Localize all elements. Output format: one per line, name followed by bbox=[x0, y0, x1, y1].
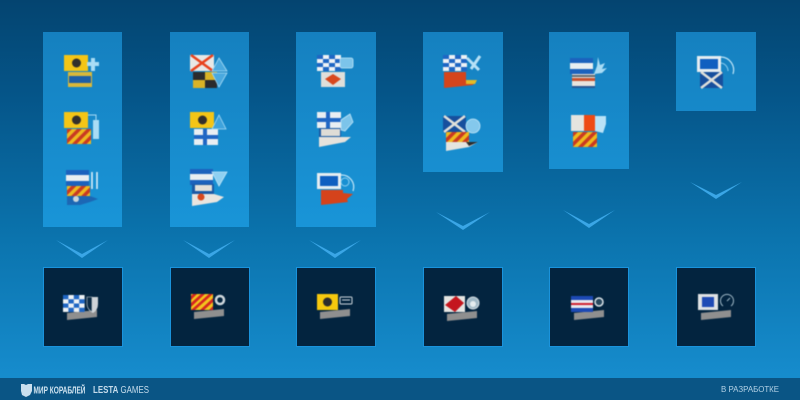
panel: column 3 signals bbox=[296, 32, 376, 227]
panel: result 6 bbox=[676, 268, 756, 346]
arrow: column 4 bbox=[436, 212, 490, 230]
footer bar bbox=[0, 378, 800, 400]
panel: column 2 signals bbox=[170, 32, 249, 227]
panel: column 6 signals bbox=[676, 32, 756, 111]
arrow: column 1 bbox=[56, 240, 108, 258]
logo: lesta games: LESTA GAMES bbox=[93, 385, 149, 396]
arrow: column 2 bbox=[183, 240, 235, 258]
signal: checkered flag with capsule icon bbox=[317, 55, 353, 87]
signal: red cross flag with triangles icon bbox=[190, 55, 227, 88]
logo: game title: МИР КОРАБЛЕЙ bbox=[34, 384, 86, 396]
signal: blue square flag with arc icon bbox=[697, 56, 734, 88]
signal: yellow flag with triangle icon bbox=[190, 112, 226, 145]
panel: result 5 bbox=[550, 268, 628, 346]
flag and lifebuoy icon bbox=[191, 294, 224, 319]
arrow: column 5 bbox=[563, 210, 615, 228]
panel: result 1 bbox=[44, 268, 122, 346]
panel: result 3 bbox=[296, 268, 376, 346]
flag and sphere icon bbox=[444, 296, 479, 321]
arrow: column 6 bbox=[690, 182, 742, 199]
signal: checkered and red pennant with plane icon bbox=[443, 55, 480, 88]
panel: column 1 signals bbox=[43, 32, 122, 227]
logo: shield bbox=[21, 384, 32, 397]
arrow: column 3 bbox=[309, 240, 361, 258]
signal: white and red flag with cup icon bbox=[571, 115, 606, 147]
panel: result 4 bbox=[424, 268, 502, 346]
signal: blue square flag with radar icon bbox=[317, 173, 354, 205]
panel: result 2 bbox=[170, 268, 250, 346]
panel: column 4 signals bbox=[423, 32, 503, 172]
signal: striped flag with wrenches icon bbox=[66, 170, 98, 205]
status label: В РАЗРАБОТКЕ bbox=[721, 384, 779, 394]
signal: striped flags with spark icon bbox=[570, 57, 607, 88]
signal: cross flag with torpedo icon bbox=[317, 112, 353, 147]
panel: column 5 signals bbox=[549, 32, 629, 169]
signal: three flags with down triangle icon bbox=[190, 169, 227, 206]
flag and gauge icon bbox=[698, 294, 734, 320]
signal: yellow flag with plus icon bbox=[64, 55, 99, 87]
flag and shield icon bbox=[63, 295, 98, 320]
signal: yellow flag with extinguisher icon bbox=[64, 112, 99, 144]
signal: saltire flag with sphere icon bbox=[443, 116, 480, 151]
flag and plate icon bbox=[317, 294, 352, 319]
flag and gear icon bbox=[571, 296, 604, 320]
